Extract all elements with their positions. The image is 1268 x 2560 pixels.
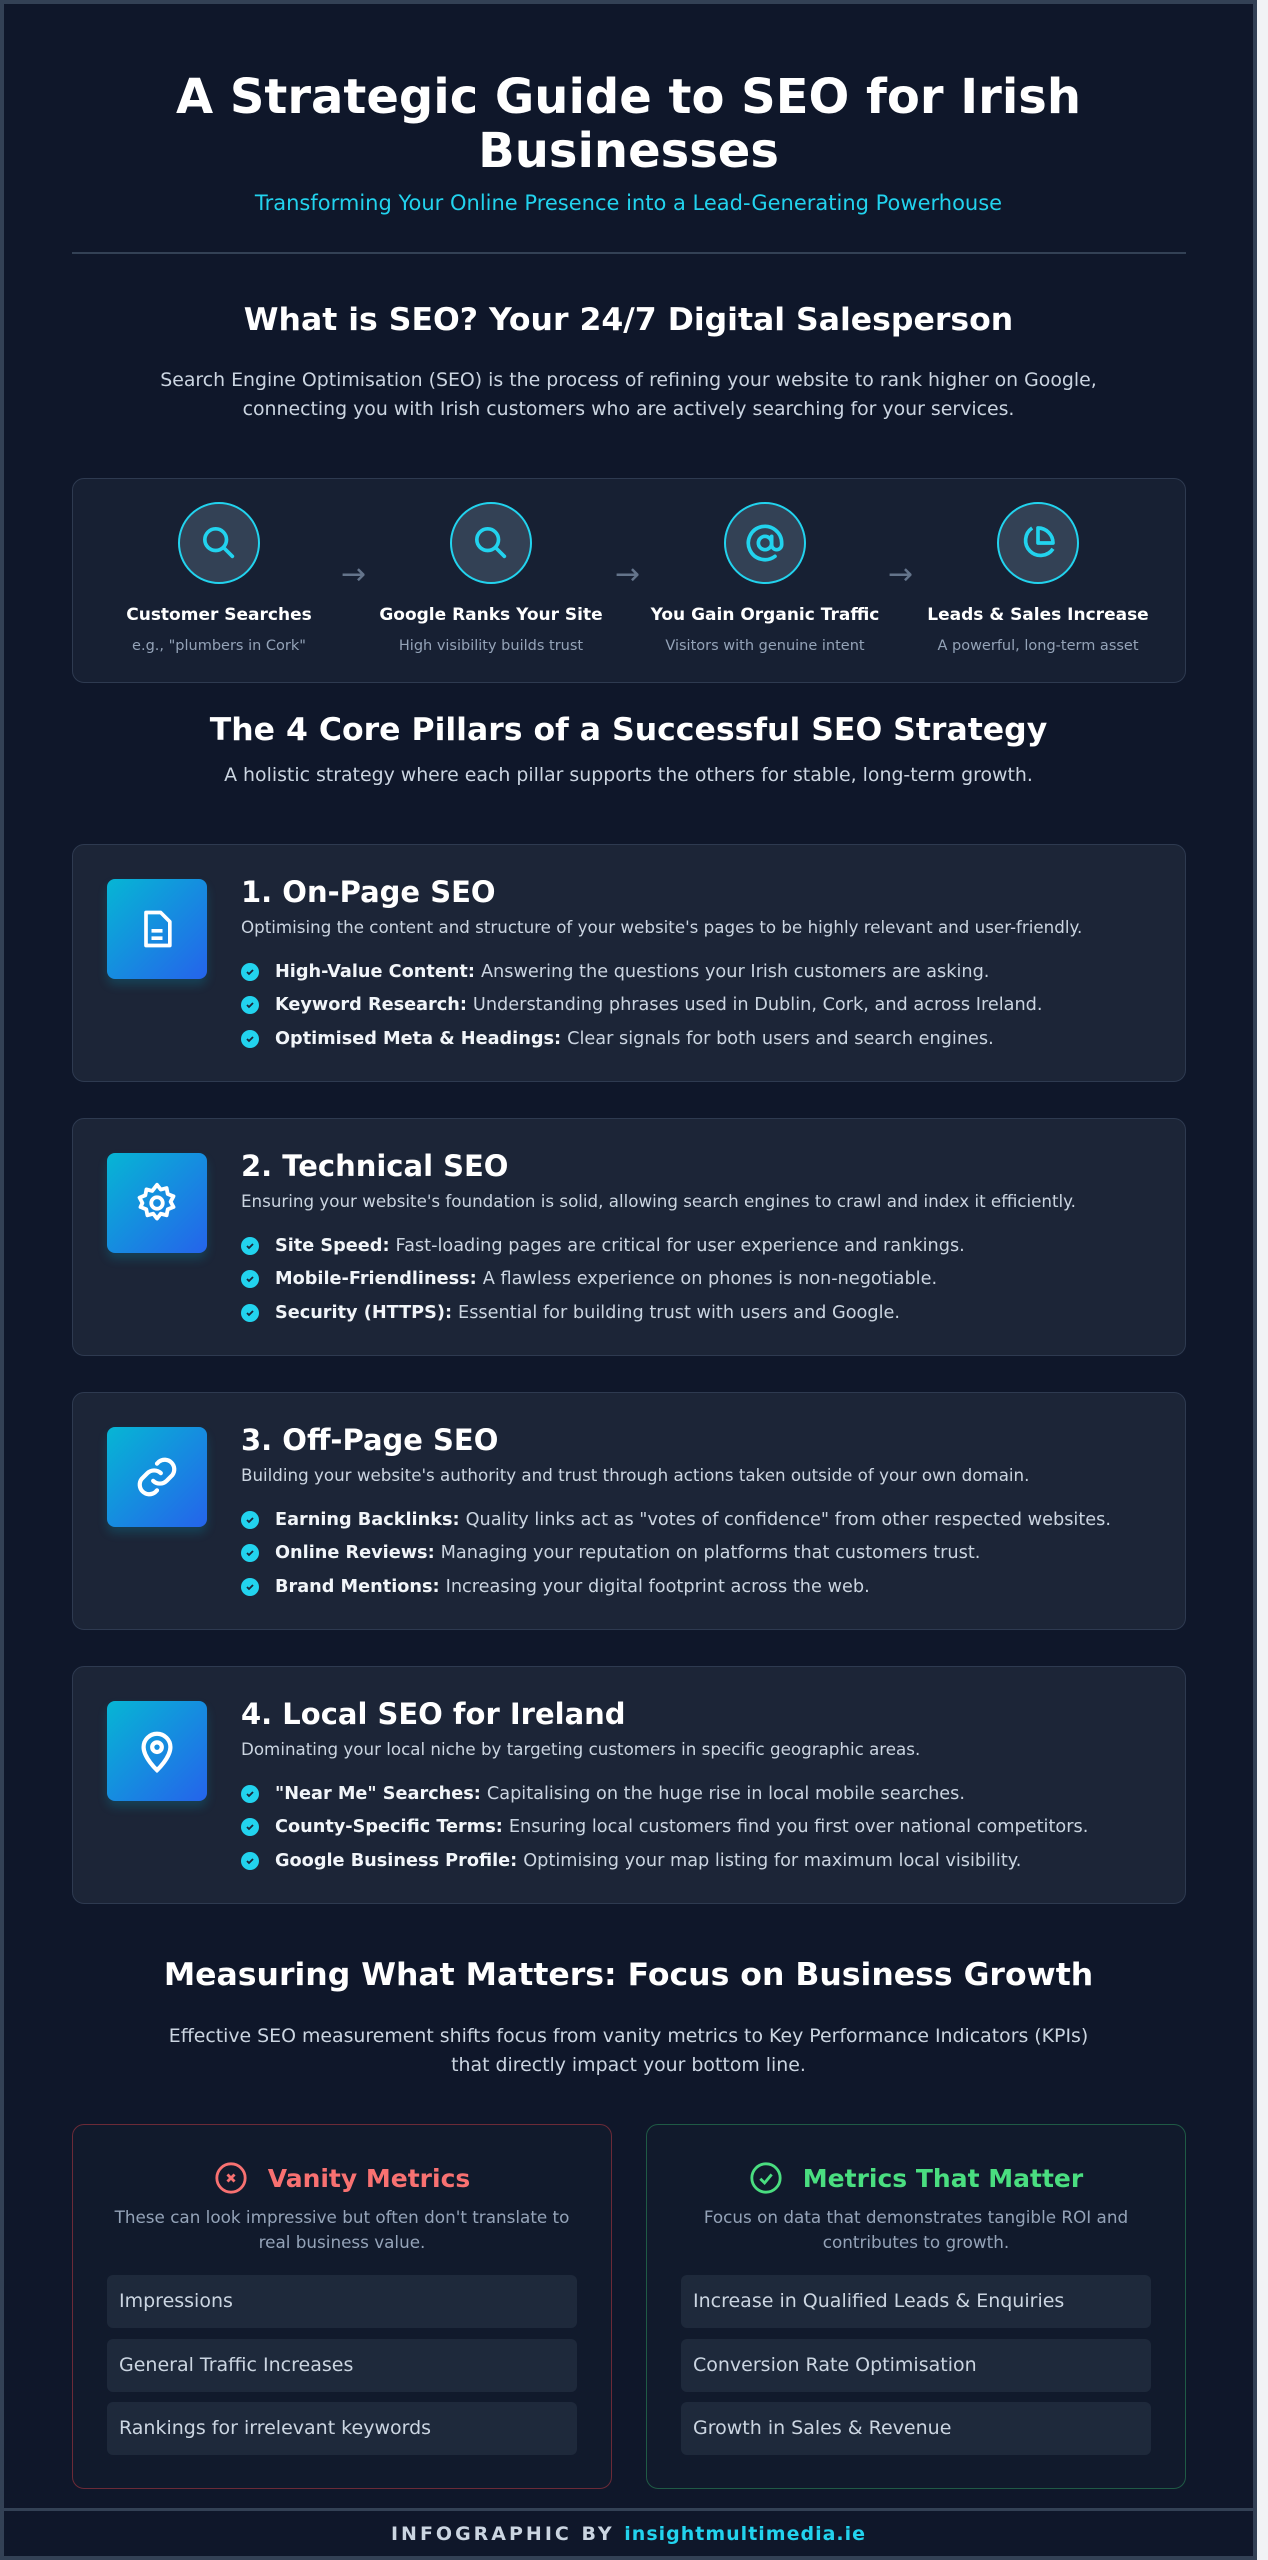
step: organic traffic: You Gain Organic Traffic (651, 605, 879, 625)
card: local: Google Business Profile: (275, 1851, 517, 1871)
card: technical: Security (HTTPS): (275, 1303, 452, 1323)
card: local: Dominating your local niche by targeting customers in specific geographic areas. (241, 1739, 920, 1759)
footer: INFOGRAPHIC BY insightmultimedia.ie (391, 2523, 866, 2545)
heading: vanity: Vanity Metrics (268, 2164, 470, 2192)
card: off-page: Brand Mentions: (275, 1577, 440, 1597)
step: customer searches: e.g., "plumbers in Cork" (132, 638, 306, 654)
card: off-page: Managing your reputation on platforms that customers trust. (441, 1543, 980, 1563)
panel: metrics that matter: Increase in Qualified Leads & Enquiries (693, 2290, 1064, 2312)
step: customer searches (126, 502, 312, 654)
card: technical: Essential for building trust with users and Google. (458, 1303, 900, 1323)
panel: vanity metrics: Impressions (119, 2290, 233, 2312)
intro paragraph (160, 369, 1097, 420)
card: on-page (72, 844, 1186, 1082)
title: Businesses (478, 123, 779, 179)
panel: metrics that matter: Focus on data that demonstrates tangible ROI and contributes to growth. (704, 2207, 1128, 2252)
card: technical: Fast-loading pages are critical for user experience and rankings. (396, 1236, 965, 1256)
card: local: 4. Local SEO for Ireland (241, 1697, 626, 1731)
card: local: Optimising your map listing for maximum local visibility. (523, 1851, 1021, 1871)
heading: measuring: Measuring What Matters: Focus on Business Growth (164, 1957, 1093, 1993)
step: organic traffic: Visitors with genuine intent (665, 638, 865, 654)
step: customer searches: Customer Searches (126, 605, 312, 625)
intro paragraph: connecting you with Irish customers who are actively searching for your services. (243, 398, 1014, 420)
card: technical: Ensuring your website's foundation is solid, allowing search engines to crawl and index it efficiently. (241, 1191, 1076, 1211)
card: on-page: Optimising the content and structure of your website's pages to be highly relevant and user-friendly. (241, 917, 1082, 937)
panel: vanity metrics (72, 2124, 612, 2489)
step: leads: A powerful, long-term asset (937, 638, 1139, 654)
icon: gear (107, 1153, 207, 1253)
title: A Strategic Guide to SEO for Irish (176, 69, 1081, 125)
intro paragraph: Search Engine Optimisation (SEO) is the process of refining your website to rank higher on Google, (160, 369, 1097, 391)
measuring paragraph: Effective SEO measurement shifts focus from vanity metrics to Key Performance Indicators (KPIs) (169, 2025, 1088, 2047)
icon: map pin (107, 1701, 207, 1801)
card: on-page: 1. On-Page SEO (241, 875, 496, 909)
step: google ranks (379, 502, 603, 654)
panel: metrics that matter: Conversion Rate Optimisation (693, 2354, 977, 2376)
arrow: → (615, 557, 640, 592)
panel: vanity metrics: General Traffic Increases (119, 2354, 353, 2376)
step: google ranks: Google Ranks Your Site (379, 605, 603, 625)
card: local (72, 1666, 1186, 1904)
card: on-page: Optimised Meta & Headings: (275, 1029, 561, 1049)
card: technical: Site Speed: (275, 1236, 390, 1256)
heading: what is SEO: What is SEO? Your 24/7 Digital Salesperson (244, 302, 1013, 338)
card: local: Ensuring local customers find you first over national competitors. (509, 1817, 1088, 1837)
measuring paragraph: that directly impact your bottom line. (451, 2054, 806, 2076)
card: on-page: Answering the questions your Irish customers are asking. (481, 962, 989, 982)
card: off-page: 3. Off-Page SEO (241, 1423, 498, 1457)
title (176, 69, 1081, 179)
card: local: Capitalising on the huge rise in local mobile searches. (487, 1784, 965, 1804)
card: on-page: High-Value Content: (275, 962, 475, 982)
card: technical (72, 1118, 1186, 1356)
card: off-page: Online Reviews: (275, 1543, 435, 1563)
card: technical: A flawless experience on phones is non-negotiable. (483, 1269, 937, 1289)
card: on-page: Understanding phrases used in Dublin, Cork, and across Ireland. (473, 995, 1043, 1015)
panel: vanity metrics: Rankings for irrelevant keywords (119, 2417, 431, 2439)
arrow: → (341, 557, 366, 592)
card: off-page: Building your website's authority and trust through actions taken outside of your own domain. (241, 1465, 1029, 1485)
step: leads (927, 502, 1149, 654)
step: leads: Leads & Sales Increase (927, 605, 1149, 625)
card: local: "Near Me" Searches: (275, 1784, 481, 1804)
card: technical: 2. Technical SEO (241, 1149, 508, 1183)
card: off-page: Increasing your digital footprint across the web. (446, 1577, 870, 1597)
card: technical: Mobile-Friendliness: (275, 1269, 477, 1289)
heading: matter: Metrics That Matter (803, 2164, 1083, 2192)
footer (4, 2508, 1253, 2560)
panel: metrics that matter: Growth in Sales & Revenue (693, 2417, 951, 2439)
panel: process flow (72, 478, 1186, 683)
panel: vanity metrics: These can look impressive but often don't translate to real business value. (115, 2207, 569, 2252)
arrow: → (888, 557, 913, 592)
icon: link (107, 1427, 207, 1527)
panel: metrics that matter (646, 2124, 1186, 2489)
card: off-page: Earning Backlinks: (275, 1510, 460, 1530)
heading: pillars: The 4 Core Pillars of a Successful SEO Strategy (210, 712, 1047, 748)
step: organic traffic (650, 502, 879, 654)
card: off-page (72, 1392, 1186, 1630)
card: local: County-Specific Terms: (275, 1817, 503, 1837)
icon: document (107, 879, 207, 979)
card: on-page: Keyword Research: (275, 995, 467, 1015)
subtitle: Transforming Your Online Presence into a Lead-Generating Powerhouse (255, 191, 1002, 215)
step: google ranks: High visibility builds trust (399, 638, 583, 654)
pillars subtitle: A holistic strategy where each pillar supports the others for stable, long-term growth. (224, 764, 1033, 786)
card: off-page: Quality links act as "votes of confidence" from other respected websites. (466, 1510, 1111, 1530)
measuring paragraph (169, 2025, 1088, 2076)
card: on-page: Clear signals for both users and search engines. (567, 1029, 994, 1049)
